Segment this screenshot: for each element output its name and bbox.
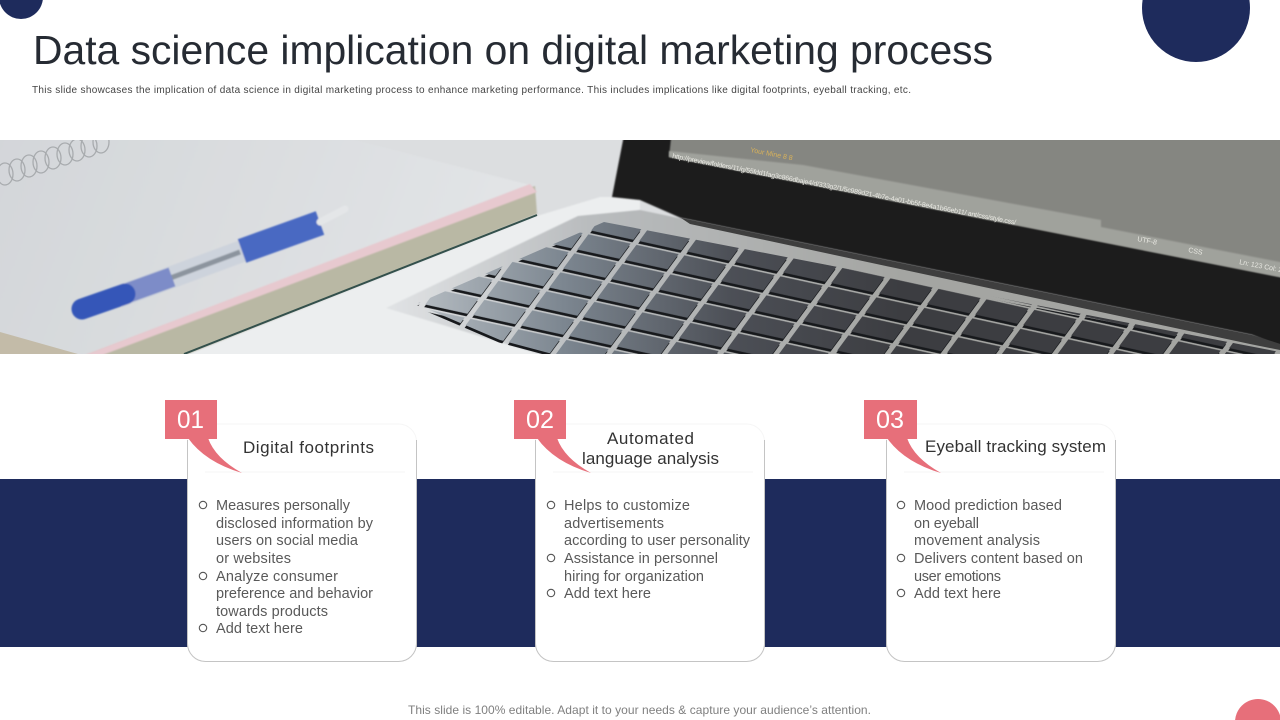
- decorative circle: bottom right: [1235, 699, 1280, 720]
- screen text: http://preview/folders/11/g/55fdd1fag3c866dbaje4/d/333g2/1/5c989d21-4b7e-4a01-bb5f-8e4a1b66eb11/ ant/css/style.css/: [672, 153, 1017, 227]
- number badge: 03: [876, 406, 904, 434]
- hinge: [681, 218, 1280, 352]
- bullet list: towards products: [216, 604, 328, 620]
- decorative circle: top left: [0, 0, 43, 19]
- bullet list: [199, 498, 374, 637]
- photo: notebook, pen and laptop: Your Mine 8 8: [750, 147, 793, 162]
- number badge: [165, 400, 242, 473]
- bullet list: Helps to customize: [564, 498, 690, 514]
- card: [188, 424, 416, 662]
- notebook lower left side: [0, 332, 78, 354]
- bullet list: or websites: [216, 551, 291, 567]
- number badge: [864, 400, 941, 473]
- title: Data science implication on digital marketing process: [33, 27, 993, 73]
- keyboard deck: [386, 210, 1280, 360]
- bullet list: preference and behavior: [216, 586, 373, 602]
- number badge: 01: [177, 406, 204, 434]
- decorative circle: top right: [1142, 0, 1250, 62]
- bullet list: disclosed information by: [216, 516, 374, 532]
- number badge: [514, 400, 591, 473]
- screen text: [672, 153, 1280, 275]
- bullet list: Assistance in personnel: [564, 551, 718, 567]
- bullet list: Delivers content based on: [914, 551, 1083, 567]
- bullet list: Add text here: [564, 586, 651, 602]
- screen: [669, 130, 1280, 279]
- footer note: This slide is 100% editable. Adapt it to your needs & capture your audience’s attention.: [408, 703, 871, 717]
- bullet list: Add text here: [216, 621, 303, 637]
- bullet list: users on social media: [216, 533, 359, 549]
- bullet list: hiring for organization: [564, 569, 704, 585]
- panel: eyeball tracking system: [864, 400, 1116, 662]
- panel: digital footprints: [165, 400, 416, 662]
- bullet list: Analyze consumer: [216, 569, 338, 585]
- bullet list: according to user personality: [564, 533, 751, 549]
- heading: [582, 429, 719, 468]
- card: [536, 424, 764, 662]
- screen text: UTF-8: [1137, 236, 1158, 247]
- notebook page: [0, 140, 8, 158]
- pen: [82, 209, 345, 309]
- heading: Eyeball tracking system: [925, 437, 1106, 456]
- navy band: [0, 479, 1280, 647]
- bullet list: user emotions: [914, 569, 1001, 585]
- card: [886, 424, 1116, 662]
- screen text: CSS: [1188, 247, 1203, 257]
- number badge: 02: [526, 406, 554, 434]
- bullet list: [547, 498, 751, 602]
- subtitle: This slide showcases the implication of data science in digital marketing process to enhance marketing performance. This includes implications like digital footprints, eyeball tracking, etc.: [32, 85, 911, 96]
- keyboard keys: [417, 230, 1275, 354]
- bullet list: advertisements: [564, 516, 664, 532]
- screen status bar: [669, 151, 1280, 279]
- heading: language analysis: [582, 449, 719, 468]
- bullet list: Mood prediction based: [914, 498, 1062, 514]
- panel: automated language analysis: [514, 400, 764, 662]
- heading: Digital footprints: [243, 438, 374, 457]
- bullet list: [897, 498, 1083, 602]
- spiral binding: [0, 140, 110, 186]
- photo: notebook, pen and laptop: [0, 130, 1280, 364]
- notebook pink edge: [82, 184, 537, 356]
- desk surface: [76, 140, 1256, 354]
- bullet list: on eyeball: [914, 516, 979, 532]
- bullet list: movement analysis: [914, 533, 1040, 549]
- notebook edge: [85, 186, 537, 356]
- bullet list: Add text here: [914, 586, 1001, 602]
- screen bezel: [612, 130, 1280, 350]
- bullet list: Measures personally: [216, 498, 351, 514]
- laptop body: [184, 197, 640, 356]
- heading: Automated: [607, 429, 694, 448]
